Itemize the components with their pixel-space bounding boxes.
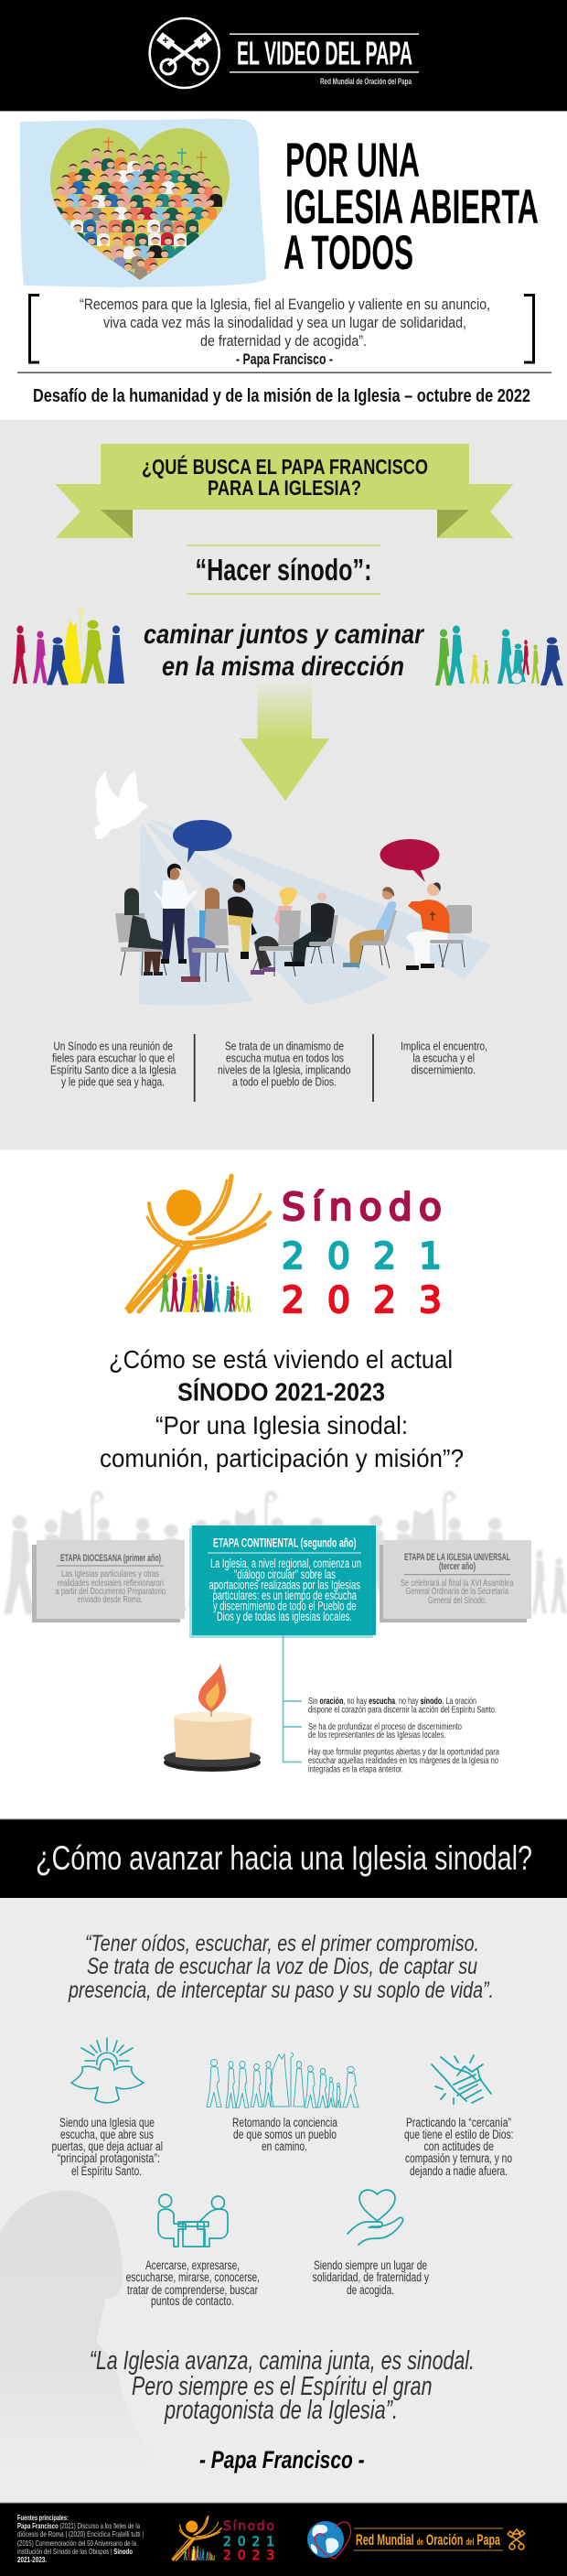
icon: holy spirit dove [71, 2038, 144, 2103]
icon: heart in hand [348, 2190, 403, 2245]
footer sources: 2021-2023. [17, 2555, 47, 2564]
panel: what the Pope seeks [0, 419, 567, 1149]
text column 1: Espíritu Santo dice a la Iglesia [50, 1063, 177, 1076]
footer sources: institución del Sínodo de los Obispos | Sínodo [17, 2547, 133, 2556]
footer sources: (2015) Conmemoración del 50 Aniversario de la [17, 2538, 136, 2548]
text column 3: la escucha y el [413, 1051, 475, 1065]
icon: candle [164, 1664, 261, 1772]
panel: etapa universal: General Ordinaria de la Secretaría [406, 1586, 508, 1597]
text: people column: Retomando la conciencia [232, 2116, 337, 2129]
footer sources: diócesis de Roma | (2020) Encíclica Fratelli tutti | [17, 2529, 144, 2538]
footer sources: Fuentes principales: [17, 2513, 69, 2522]
text: closeness column: que tiene el estilo de Dios: [404, 2128, 514, 2141]
text column 1 [50, 1040, 177, 1089]
speech bubble red [380, 839, 439, 882]
text column 2: escucha mutua en todos los [226, 1051, 344, 1065]
notes: continental stage: de los representantes de las Iglesias locales. [308, 1730, 446, 1741]
heading: synod question: SÍNODO 2021-2023 [177, 1378, 385, 1406]
notes: continental stage [308, 1696, 499, 1775]
text column 3 [401, 1040, 487, 1076]
text: dialogue column: Acercarse, expresarse, [145, 2258, 240, 2272]
text: solidarity column: Siendo siempre un lugar de [314, 2258, 427, 2272]
panel: etapa continental: Dios y de todas las iglesias locales. [217, 1610, 352, 1623]
text: spirit column: escucha, que abre sus [60, 2128, 154, 2141]
tagline: caminar juntos: caminar juntos y caminar [144, 620, 425, 650]
text: spirit column: puertas, que deja actuar al [51, 2139, 163, 2153]
tagline: caminar juntos [144, 620, 425, 682]
connector lines [284, 1635, 302, 1762]
text: dialogue column: tratar de comprenderse, buscar [127, 2283, 258, 2297]
footer globe logo [307, 2521, 525, 2559]
quote: la iglesia avanza: protagonista de la Iglesia”. [164, 2396, 398, 2425]
text: closeness column: Practicando la “cercanía” [406, 2116, 511, 2129]
text: closeness column: dejando a nadie afuera. [410, 2164, 508, 2178]
prayer quote with brackets: viva cada vez más la sinodalidad y sea un lugar de solidaridad, [103, 314, 466, 331]
panel: etapa universal: General del Sínodo. [428, 1595, 487, 1606]
ribbon heading [55, 444, 514, 538]
text column 1: fieles para escuchar lo que el [52, 1051, 175, 1065]
logo wordmark: Red Mundial de Oración del Papa [320, 77, 412, 87]
synod logo: 2021 [282, 1236, 442, 1277]
text: closeness column: con actitudes de [424, 2139, 494, 2153]
prayer quote with brackets: de fraternidad y de acogida”. [200, 332, 367, 350]
text column 1: y le pide que sea y haga. [61, 1074, 165, 1089]
icon: white dove [94, 771, 148, 839]
panel: etapa continental: ETAPA CONTINENTAL (segundo año) [213, 1536, 357, 1550]
text: spirit column: Siendo una Iglesia que [59, 2116, 155, 2129]
text: people column: de que somos un pueblo [233, 2128, 337, 2141]
panel: etapa diocesana [32, 1540, 185, 1622]
light rays [139, 819, 492, 1006]
panel: etapa continental: particulares: es un tiempo de escucha [212, 1589, 357, 1602]
panel: etapa universal: (tercer año) [439, 1561, 476, 1572]
logo wordmark [230, 33, 419, 87]
panel: etapa universal [380, 1540, 531, 1622]
text column 2 [218, 1040, 351, 1089]
text: solidarity column: de acogida. [347, 2283, 394, 2297]
panel: etapa diocesana: a partir del Documento Preparatorio [55, 1586, 166, 1597]
icon: crossed keys logo [150, 18, 219, 88]
walkers right [435, 626, 563, 685]
main title: A TODOS [284, 226, 413, 280]
tagline: caminar juntos: en la misma dirección [162, 652, 404, 682]
text: people column: en camino. [262, 2139, 307, 2153]
prayer quote with brackets: “Recemos para que la Iglesia, fiel al Evangelio y valiente en su anuncio, [80, 296, 490, 313]
text column 2: niveles de la Iglesia, implicando [218, 1063, 351, 1076]
panel: how to advance [0, 1898, 567, 2503]
footer synod logo [172, 2517, 274, 2563]
footer synod logo: Sínodo [223, 2519, 274, 2534]
background silhouettes [4, 1493, 567, 1614]
panel: etapa diocesana: ETAPA DIOCESANA (primer año) [60, 1553, 161, 1564]
main title: POR UNA [285, 134, 420, 188]
panel: etapa continental: aportaciones realizadas por las Iglesias [209, 1578, 360, 1592]
text: people column [232, 2116, 337, 2153]
panel: etapa diocesana: realidades eclesiales reflexionaron [57, 1578, 164, 1589]
footer globe logo: Red Mundial de Oración del Papa [356, 2531, 500, 2549]
text column 2: Se trata de un dinamismo de [225, 1040, 344, 1052]
quote: tener oidos [68, 1931, 494, 2003]
speech bubble blue [173, 820, 232, 863]
text: spirit column: el Espíritu Santo. [71, 2164, 142, 2178]
synod logo [126, 1176, 442, 1321]
panel: etapa continental: "diálogo circular" sobre las [234, 1568, 336, 1581]
arrow down [240, 680, 329, 801]
text column 3: discernimiento. [412, 1063, 476, 1076]
heading: synod question: comunión, participación y misión”? [100, 1444, 464, 1472]
footer sources [17, 2513, 144, 2564]
black heading band [0, 1819, 567, 1898]
notes: continental stage: integradas en la etapa anterior. [308, 1764, 403, 1775]
notes: continental stage: Hay que formular preguntas abiertas y dar la oportunidad para [308, 1747, 499, 1758]
panel: etapa continental: La Iglesia, a nivel regional, comienza un [210, 1557, 361, 1570]
notes: continental stage: escuchar aquellas realidades en los márgenes de la Iglesia no [308, 1755, 498, 1766]
quote attribution: - Papa Francisco - [199, 2446, 365, 2474]
text: dialogue column: escucharse, mirarse, conocerse, [126, 2270, 260, 2284]
synod logo: 2023 [282, 1280, 442, 1321]
panel: etapa diocesana: Las Iglesias particulares y otras [61, 1568, 159, 1579]
panel: etapa continental: y discernimiento de todo el Pueblo de [213, 1600, 357, 1612]
text column 2: a todo el pueblo de Dios. [232, 1074, 337, 1089]
walkers left [13, 609, 124, 684]
footer synod logo: 2021 [223, 2535, 274, 2549]
footer sources: Papa Francisco (2021) Discurso a los fieles de la [17, 2521, 140, 2530]
icon: clasped hands [432, 2055, 491, 2104]
heading: synod question: “Por una Iglesia sinodal: [155, 1411, 408, 1439]
ribbon heading: ¿QUÉ BUSCA EL PAPA FRANCISCO [142, 454, 428, 479]
main title [284, 134, 539, 280]
illustration: people in a circle [115, 864, 472, 982]
heading: synod question [100, 1345, 464, 1472]
prayer quote with brackets: - Papa Francisco - [236, 350, 333, 368]
text: closeness column: compasión y ternura, y no [405, 2151, 512, 2165]
text: closeness column [404, 2116, 514, 2178]
text column 1: Un Sínodo es una reunión de [53, 1040, 173, 1052]
text: dialogue column: puntos de contacto. [151, 2294, 234, 2308]
pope silhouette [0, 2191, 152, 2498]
text: dialogue column [126, 2258, 260, 2308]
hero illustration: heart of people [20, 119, 266, 287]
ribbon heading: PARA LA IGLESIA? [208, 476, 361, 500]
synod logo: Sínodo [282, 1185, 442, 1229]
header band [0, 0, 567, 112]
heading: hacer sinodo: “Hacer sínodo”: [196, 553, 371, 587]
heading: synod question: ¿Cómo se está viviendo el actual [109, 1345, 453, 1374]
text column 3: Implica el encuentro, [401, 1040, 487, 1052]
panel: etapa continental [189, 1525, 376, 1638]
text: spirit column [51, 2116, 163, 2178]
quote: la iglesia avanza [90, 2346, 475, 2425]
notes: continental stage: dispone el corazón para discernir la acción del Espíritu Santo. [308, 1705, 497, 1716]
footer band [0, 2502, 567, 2576]
prayer quote with brackets [29, 295, 534, 368]
icon: outlined walkers [207, 2053, 358, 2107]
quote: la iglesia avanza: Pero siempre es el Espíritu el gran [132, 2372, 432, 2401]
text: solidarity column [313, 2258, 429, 2297]
panel: etapa universal: Se celebrará al final la XVI Asamblea [401, 1578, 514, 1589]
icon: people at table [158, 2194, 228, 2247]
icon: small gold keys [508, 2529, 525, 2549]
footer synod logo: 2023 [223, 2549, 274, 2563]
text: spirit column: “principal protagonista”: [57, 2151, 160, 2165]
logo wordmark: EL VIDEO DEL PAPA [237, 35, 412, 72]
notes: continental stage: Sin oración, no hay escucha, no hay sínodo. La oración [308, 1696, 476, 1707]
text: solidarity column: solidaridad, de fraternidad y [313, 2270, 429, 2284]
notes: continental stage: Se ha de profundizar el proceso de discernimiento [308, 1721, 462, 1732]
panel: etapa diocesana: enviado desde Roma. [78, 1594, 143, 1605]
